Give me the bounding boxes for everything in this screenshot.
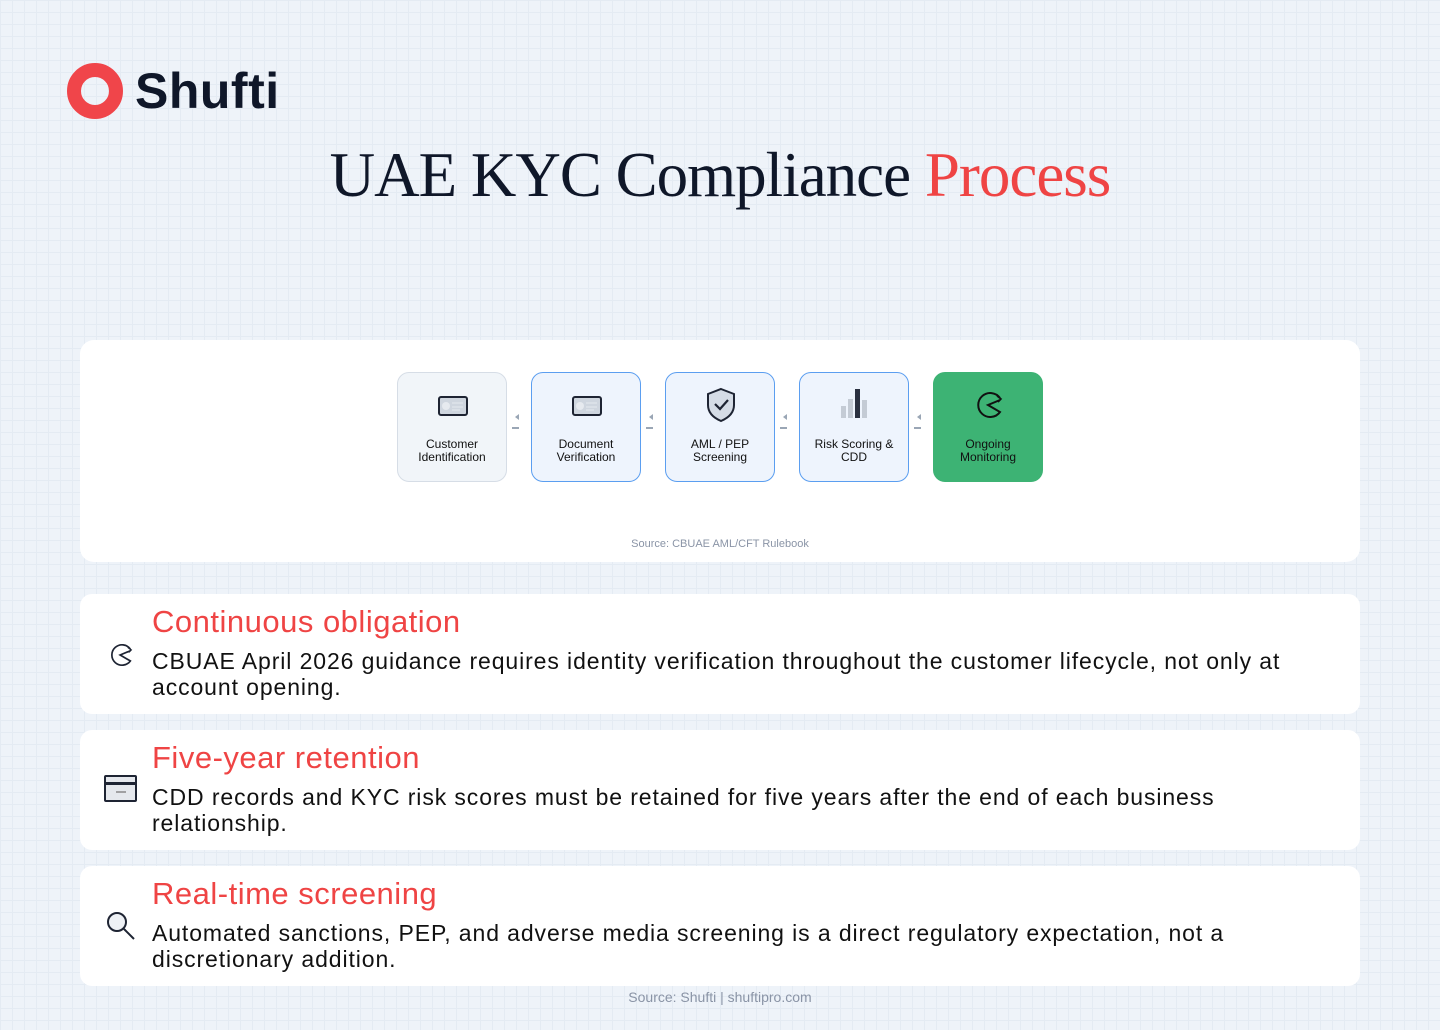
icon: archive [104,775,137,802]
icon: search [107,912,135,940]
card: five-year retention: CDD records and KYC risk scores must be retained for five years after the end of each business relationship. [152,784,1215,836]
step 1: Customer [426,437,478,451]
step 4 [799,372,909,482]
step 5 [933,372,1043,482]
card: continuous obligation: Continuous obligation [152,604,461,639]
footer source: Source: Shufti | shuftipro.com [628,989,812,1005]
step 2: Document [559,437,613,451]
step 1: Identification [418,450,486,464]
arrow 3 [780,414,787,429]
card: five-year retention: Five-year retention [152,740,420,775]
step 4: CDD [841,450,867,464]
panel: process flow [80,340,1360,562]
arrow 1 [512,414,519,429]
step 3: AML / PEP [691,437,749,451]
card: continuous obligation [80,594,1360,714]
step 2: Verification [557,450,615,464]
step 4: Risk Scoring & [815,437,893,451]
card: real-time screening [80,866,1360,986]
step 5: Ongoing [965,437,1011,451]
card: five-year retention [80,730,1360,850]
title: UAE KYC Compliance Process [330,140,1110,210]
step 3 [665,372,775,482]
step 2 [531,372,641,482]
logo: Shufti [135,63,280,119]
step 1 [397,372,507,482]
card: real-time screening: Automated sanctions, PEP, and adverse media screening is a direct regulatory expectation, not a discretionary addition. [152,920,1224,972]
logo [67,63,280,119]
arrow 2 [646,414,653,429]
card: continuous obligation: CBUAE April 2026 guidance requires identity verification throughout the customer lifecycle, not only at account opening. [152,648,1280,700]
source note: Source: CBUAE AML/CFT Rulebook [631,538,809,550]
card: real-time screening: Real-time screening [152,876,437,911]
step 3: Screening [693,450,747,464]
step 5: Monitoring [960,450,1016,464]
icon: monitoring [111,644,132,666]
arrow 4 [914,414,921,429]
